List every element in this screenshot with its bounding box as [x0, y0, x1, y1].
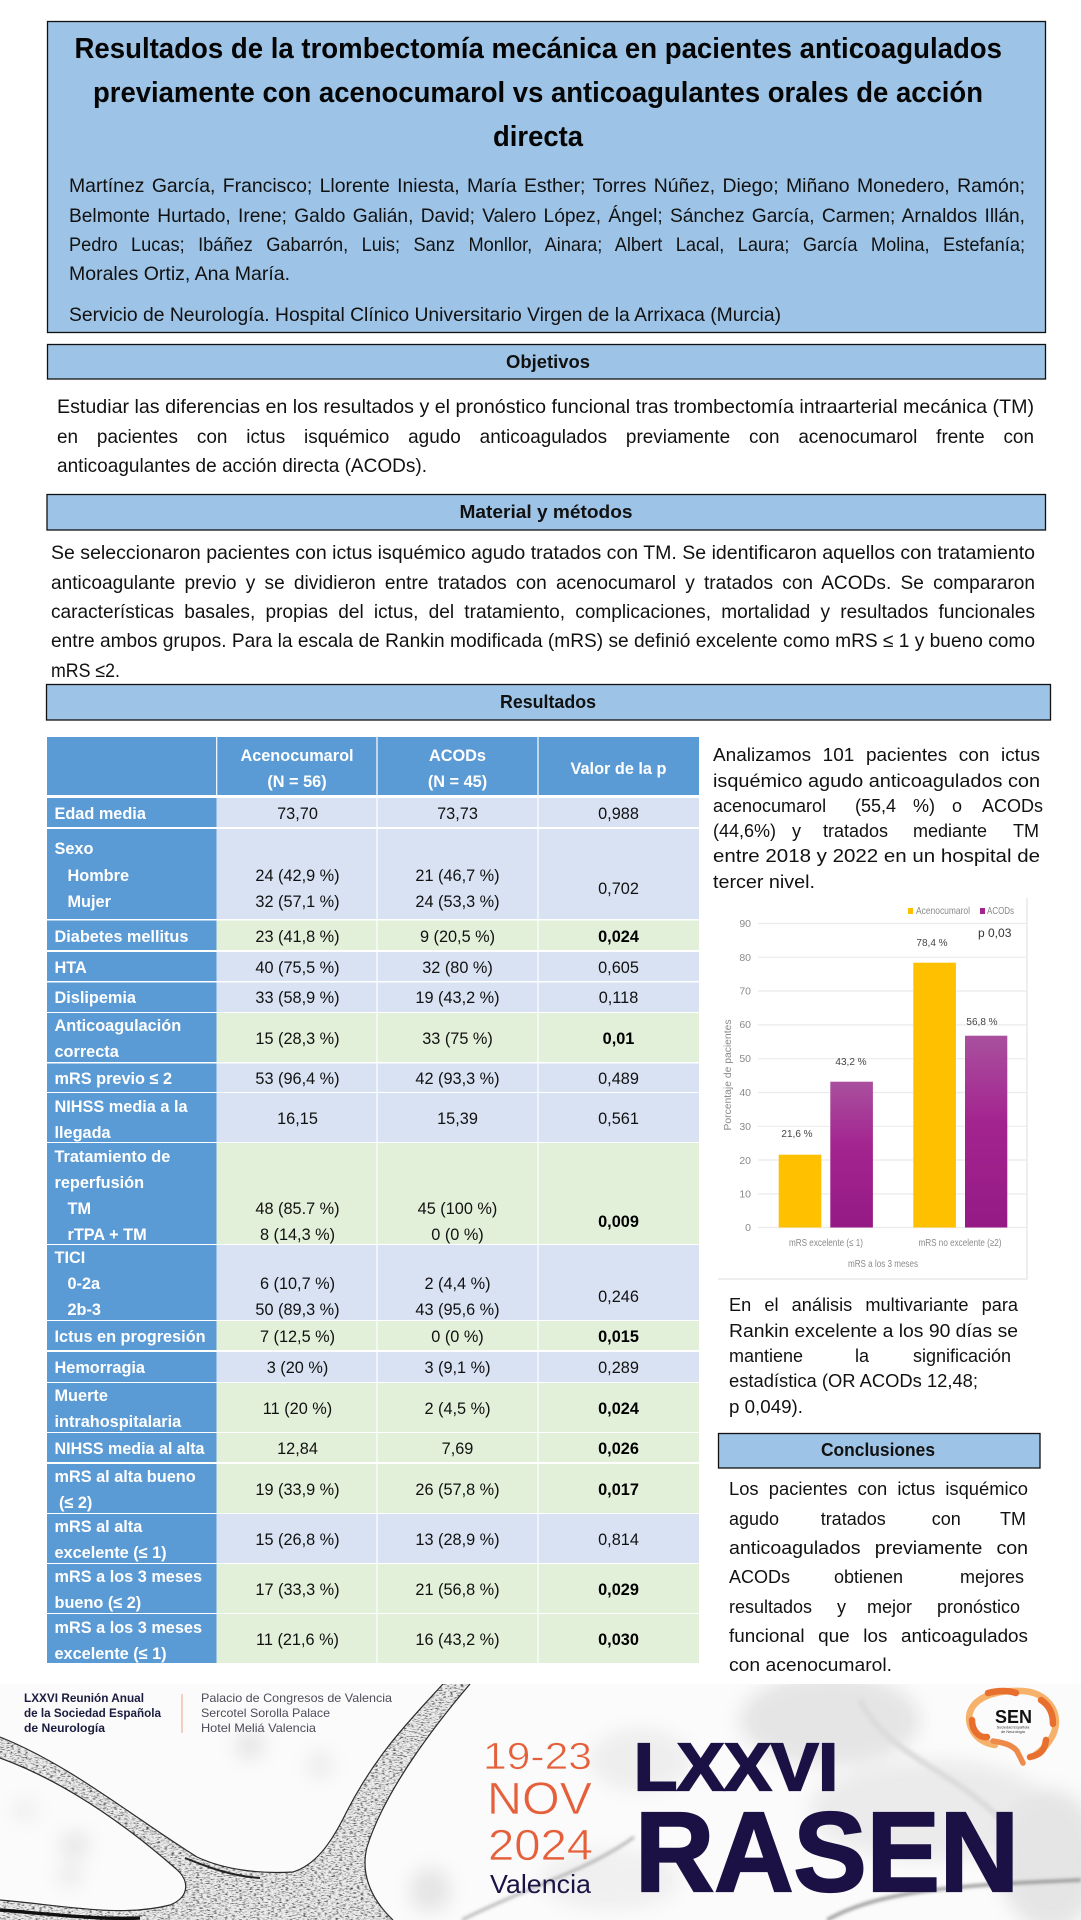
- text: material y métodos: mRS ≤2.: [51, 660, 120, 682]
- y axis labels: [739, 918, 751, 1234]
- row: Tratamiento de reperfusión: [47, 1143, 699, 1244]
- conference text top left: de la Sociedad Española: [24, 1706, 161, 1720]
- text: material y métodos: características basales, propias del ictus, del tratamiento, complicaciones, mortalidad y resultados funcionales: [51, 601, 1035, 623]
- row: mRS previo: 42 (93,3 %): [415, 1070, 500, 1088]
- banner background: [0, 1675, 1081, 1920]
- row: mRS al alta bueno: 26 (57,8 %): [415, 1481, 500, 1499]
- row: Tratamiento de reperfusión: 0 (0 %): [431, 1226, 484, 1244]
- row: TICI: 0-2a: [68, 1275, 101, 1293]
- row: mRS a los 3 meses excelente: 11 (21,6 %): [256, 1631, 339, 1649]
- text: analysis summary: tratados: [823, 821, 888, 841]
- heading: Conclusiones: Conclusiones: [821, 1439, 935, 1460]
- text: multivariate analysis: Rankin excelente a los 90 días se: [729, 1321, 1018, 1341]
- row: mRS previo: [47, 1064, 699, 1092]
- row: Tratamiento de reperfusión: rTPA + TM: [68, 1226, 147, 1244]
- text: multivariate analysis: la: [855, 1346, 870, 1366]
- row: NIHSS media al alta: [47, 1433, 699, 1462]
- row: mRS al alta excelente: excelente (≤ 1): [54, 1544, 167, 1562]
- dates: 2024: [488, 1821, 593, 1870]
- authors: Morales Ortiz, Ana María.: [69, 263, 290, 285]
- text: analysis summary: ACODs: [982, 796, 1043, 816]
- row: mRS al alta bueno: (≤ 2): [59, 1494, 92, 1512]
- value labels: [781, 938, 998, 1140]
- text: analysis summary: y: [792, 821, 801, 841]
- row: TICI: 50 (89,3 %): [255, 1301, 340, 1319]
- authors: Pedro Lucas; Ibáñez Gabarrón, Luis; Sanz Monllor, Ainara; Albert Lacal, Laura; García Molina, Estefanía;: [69, 234, 1025, 256]
- row: mRS previo: 53 (96,4 %): [255, 1070, 340, 1088]
- row: Muerte intrahospitalaria: intrahospitalaria: [54, 1413, 182, 1431]
- heading: Resultados: [46, 684, 1050, 720]
- row: HTA: 40 (75,5 %): [255, 959, 340, 977]
- row: Edad media: Edad media: [54, 805, 147, 823]
- text: conclusiones: mejores: [960, 1567, 1024, 1587]
- y axis labels: 20: [739, 1155, 751, 1167]
- text: analysis summary: entre 2018 y 2022 en un hospital de: [713, 846, 1040, 866]
- category labels: mRS a los 3 meses: [848, 1258, 918, 1270]
- text: conclusiones: con: [932, 1509, 961, 1529]
- row: Diabetes mellitus: [47, 920, 699, 950]
- row: Anticoagulación correcta: [47, 1013, 699, 1062]
- text: conclusiones: TM: [1000, 1509, 1026, 1529]
- dates: 19-23: [483, 1736, 592, 1778]
- row: HTA: [47, 952, 699, 981]
- row: Sexo: Sexo: [54, 840, 93, 858]
- row: TICI: 0,246: [598, 1288, 639, 1306]
- row: NIHSS media a la llegada: [47, 1093, 699, 1142]
- y axis labels: 40: [739, 1087, 751, 1099]
- row: Diabetes mellitus: Diabetes mellitus: [54, 928, 188, 946]
- row: Muerte intrahospitalaria: 11 (20 %): [263, 1400, 332, 1418]
- row: Dislipemia: 19 (43,2 %): [415, 989, 500, 1007]
- category labels: mRS excelente (≤ 1): [789, 1237, 863, 1249]
- venues: Hotel Meliá Valencia: [201, 1721, 316, 1735]
- row: mRS a los 3 meses excelente: [47, 1614, 699, 1663]
- category labels: [789, 1237, 1002, 1270]
- row: TICI: 43 (95,6 %): [415, 1301, 500, 1319]
- row: NIHSS media al alta: 7,69: [442, 1440, 473, 1458]
- title: Resultados de la trombectomía mecánica en pacientes anticoagulados: [74, 33, 1002, 65]
- table header: Acenocumarol: [240, 747, 354, 765]
- text: multivariate analysis: significación: [913, 1346, 1011, 1366]
- row: NIHSS media a la llegada: llegada: [54, 1124, 112, 1142]
- row: Sexo: 24 (53,3 %): [415, 893, 500, 911]
- row: NIHSS media al alta: NIHSS media al alta: [54, 1440, 205, 1458]
- text: conclusiones: mejor: [867, 1597, 912, 1617]
- text: conclusiones: Los pacientes con ictus isquémico: [729, 1479, 1028, 1499]
- city: Valencia: [490, 1869, 592, 1899]
- title: [74, 33, 1002, 153]
- title: directa: [493, 121, 584, 153]
- row: Hemorragia: Hemorragia: [54, 1359, 146, 1377]
- event name: [638, 1742, 1013, 1894]
- row: TICI: 2 (4,4 %): [424, 1275, 491, 1293]
- conference text top left: LXXVI Reunión Anual: [24, 1691, 144, 1705]
- legend: Acenocumarol: [916, 905, 970, 917]
- legend: ACODs: [987, 905, 1014, 917]
- affiliation: Servicio de Neurología. Hospital Clínico Universitario Virgen de la Arrixaca (Murcia): [69, 304, 781, 326]
- row: Edad media: 0,988: [598, 805, 639, 823]
- row: mRS al alta excelente: [47, 1514, 699, 1563]
- row: mRS a los 3 meses bueno: 21 (56,8 %): [415, 1581, 500, 1599]
- y axis labels: 90: [739, 918, 751, 930]
- text: material y métodos: entre ambos grupos. Para la escala de Rankin modificada (mRS) se definió excelente como mRS ≤ 1 y bueno como: [51, 630, 1035, 652]
- y axis labels: 10: [739, 1188, 751, 1200]
- text: objetivos: [57, 396, 1034, 477]
- table header: ACODs: [429, 747, 486, 765]
- table header: (N = 45): [428, 773, 487, 791]
- row: TICI: TICI: [54, 1249, 85, 1267]
- row: Sexo: 24 (42,9 %): [255, 867, 340, 885]
- row: Ictus en progresión: 0 (0 %): [431, 1328, 484, 1346]
- row: Edad media: [47, 798, 699, 827]
- value labels: 21,6 %: [781, 1129, 813, 1140]
- row: Ictus en progresión: [47, 1321, 699, 1350]
- text: conclusiones: [729, 1479, 1028, 1675]
- row: mRS al alta excelente: 0,814: [598, 1531, 639, 1549]
- dates: NOV: [487, 1773, 592, 1824]
- row: mRS al alta bueno: 0,017: [598, 1481, 639, 1499]
- row: TICI: [47, 1245, 699, 1320]
- row: Diabetes mellitus: 23 (41,8 %): [255, 928, 340, 946]
- text: analysis summary: isquémico agudo anticoagulados con: [713, 771, 1040, 791]
- value labels: 78,4 %: [916, 938, 948, 949]
- y axis labels: 80: [739, 952, 751, 964]
- text: conclusiones: con acenocumarol.: [729, 1655, 892, 1675]
- authors: Martínez García, Francisco; Llorente Iniesta, María Esther; Torres Núñez, Diego; Miñano Monedero, Ramón;: [69, 175, 1025, 197]
- venues: Sercotel Sorolla Palace: [201, 1706, 330, 1720]
- logo: SEN brain: Sociedad Española: [997, 1726, 1030, 1730]
- text: analysis summary: mediante: [913, 821, 987, 841]
- text: material y métodos: [51, 542, 1035, 682]
- row: Sexo: 21 (46,7 %): [415, 867, 500, 885]
- row: Edad media: 73,70: [277, 805, 318, 823]
- row: Sexo: 32 (57,1 %): [255, 893, 340, 911]
- heading: Material y métodos: [47, 494, 1046, 530]
- row: mRS previo: mRS previo ≤ 2: [54, 1070, 172, 1088]
- row: Hemorragia: 3 (20 %): [267, 1359, 328, 1377]
- row: mRS al alta excelente: 13 (28,9 %): [415, 1531, 500, 1549]
- text: conclusiones: y: [837, 1597, 846, 1617]
- row: Muerte intrahospitalaria: Muerte: [54, 1387, 108, 1405]
- text: conclusiones: pronóstico: [937, 1597, 1020, 1617]
- text: conclusiones: anticoagulados previamente con: [729, 1538, 1028, 1558]
- row: mRS al alta excelente: 15 (26,8 %): [255, 1531, 340, 1549]
- row: Tratamiento de reperfusión: Tratamiento de: [54, 1148, 170, 1166]
- table header: Valor de la p: [571, 760, 667, 778]
- logo: SEN brain: de Neurología: [1001, 1730, 1026, 1734]
- venues: Palacio de Congresos de Valencia: [201, 1691, 392, 1705]
- heading: Objetivos: Objetivos: [506, 351, 590, 372]
- row: mRS a los 3 meses bueno: mRS a los 3 meses: [54, 1568, 202, 1586]
- row: Anticoagulación correcta: Anticoagulación: [54, 1017, 181, 1035]
- text: analysis summary: (44,6%): [713, 821, 776, 841]
- row: NIHSS media a la llegada: NIHSS media a la: [54, 1098, 188, 1116]
- heading: Objetivos: [48, 344, 1046, 379]
- row: Diabetes mellitus: 0,024: [598, 928, 639, 946]
- row: mRS al alta bueno: mRS al alta bueno: [54, 1468, 196, 1486]
- row: Tratamiento de reperfusión: 8 (14,3 %): [260, 1226, 335, 1244]
- y axis labels: 50: [739, 1053, 751, 1065]
- y axis labels: 60: [739, 1019, 751, 1031]
- row: Ictus en progresión: 0,015: [598, 1328, 639, 1346]
- row: Muerte intrahospitalaria: [47, 1383, 699, 1432]
- value labels: 56,8 %: [966, 1017, 998, 1028]
- text: multivariate analysis: p 0,049).: [729, 1397, 803, 1417]
- value labels: 43,2 %: [835, 1057, 867, 1068]
- row: Tratamiento de reperfusión: 45 (100 %): [418, 1200, 497, 1218]
- text: analysis summary: acenocumarol: [713, 796, 826, 816]
- row: Dislipemia: [47, 982, 699, 1012]
- heading: Resultados: Resultados: [500, 691, 596, 712]
- text: conclusiones: funcional que los anticoagulados: [729, 1626, 1028, 1646]
- row: mRS al alta excelente: mRS al alta: [54, 1518, 143, 1536]
- row: mRS al alta bueno: 19 (33,9 %): [255, 1481, 340, 1499]
- row: mRS a los 3 meses bueno: [47, 1564, 699, 1613]
- row: Muerte intrahospitalaria: 2 (4,5 %): [424, 1400, 491, 1418]
- row: mRS a los 3 meses bueno: 0,029: [598, 1581, 639, 1599]
- banner: congress footer: [0, 1675, 1081, 1920]
- text: objetivos: anticoagulantes de acción directa (ACODs).: [57, 455, 427, 477]
- text: conclusiones: resultados: [729, 1597, 812, 1617]
- row: Edad media: 73,73: [437, 805, 478, 823]
- y axis title: Porcentaje de pacientes: [722, 1020, 734, 1130]
- row: Tratamiento de reperfusión: 0,009: [598, 1213, 639, 1231]
- row: Tratamiento de reperfusión: reperfusión: [54, 1174, 144, 1192]
- text: conclusiones: agudo: [729, 1509, 779, 1529]
- text: analysis summary: %): [913, 796, 935, 816]
- row: Ictus en progresión: 7 (12,5 %): [260, 1328, 335, 1346]
- row: Diabetes mellitus: 9 (20,5 %): [420, 928, 495, 946]
- heading: Material y métodos: Material y métodos: [460, 501, 632, 522]
- text: multivariate analysis: estadística (OR ACODs 12,48;: [729, 1371, 978, 1391]
- row: mRS a los 3 meses excelente: excelente (≤ 1): [54, 1645, 167, 1663]
- venues: [202, 1694, 392, 1732]
- row: TICI: 6 (10,7 %): [260, 1275, 335, 1293]
- row: Sexo: [47, 829, 699, 919]
- row: HTA: HTA: [54, 959, 87, 977]
- y axis labels: 30: [739, 1121, 751, 1133]
- logo: SEN brain: SEN: [995, 1707, 1032, 1727]
- row: Hemorragia: 0,289: [598, 1359, 639, 1377]
- row: mRS a los 3 meses excelente: 16 (43,2 %): [415, 1631, 500, 1649]
- row: NIHSS media al alta: 0,026: [598, 1440, 639, 1458]
- y axis labels: 70: [739, 986, 751, 998]
- panel: title and authors: [48, 22, 1046, 332]
- row: mRS a los 3 meses excelente: 0,030: [598, 1631, 639, 1649]
- text: analysis summary: tercer nivel.: [713, 872, 815, 892]
- logo: SEN brain: [969, 1691, 1056, 1763]
- bar chart: mRS a los 3 meses: [718, 898, 1027, 1279]
- dates: [486, 1742, 592, 1860]
- conference text top left: [24, 1691, 161, 1735]
- text: objetivos: en pacientes con ictus isquémico agudo anticoagulados previamente con acenocumarol frente con: [57, 426, 1034, 448]
- row: Hemorragia: [47, 1352, 699, 1382]
- text: material y métodos: anticoagulante previo y se dividieron entre tratados con acenocumarol y tratados con ACODs. Se compararon: [51, 572, 1035, 594]
- legend: [908, 905, 1014, 917]
- row: Sexo: Hombre: [68, 867, 129, 885]
- text: conclusiones: obtienen: [834, 1567, 903, 1587]
- row: NIHSS media al alta: 12,84: [277, 1440, 318, 1458]
- row: Dislipemia: Dislipemia: [54, 989, 137, 1007]
- row: Sexo: Mujer: [68, 893, 112, 911]
- text: analysis summary: (55,4: [855, 796, 896, 816]
- row: Sexo: 0,702: [598, 880, 639, 898]
- neuron illustration: [0, 1684, 480, 1920]
- text: analysis summary: o: [952, 796, 962, 816]
- row: Tratamiento de reperfusión: TM: [68, 1200, 91, 1218]
- text: objetivos: Estudiar las diferencias en los resultados y el pronóstico funcional tras trombectomía intraarterial mecánica (TM): [57, 396, 1034, 418]
- authors: Belmonte Hurtado, Irene; Galdo Galián, David; Valero López, Ángel; Sánchez García, Carmen; Arnaldos Illán,: [69, 204, 1025, 227]
- heading: Conclusiones: [718, 1434, 1040, 1468]
- row: Anticoagulación correcta: correcta: [54, 1043, 120, 1061]
- row: Dislipemia: 0,118: [599, 989, 638, 1007]
- table header: (N = 56): [267, 773, 327, 791]
- row: mRS al alta bueno: [47, 1464, 699, 1513]
- row: HTA: 32 (80 %): [422, 959, 493, 977]
- text: material y métodos: Se seleccionaron pacientes con ictus isquémico agudo tratados con TM. Se identificaron aquellos con tratamiento: [51, 542, 1035, 564]
- row: mRS a los 3 meses bueno: bueno (≤ 2): [54, 1594, 141, 1612]
- row: mRS previo: 0,489: [598, 1070, 639, 1088]
- title: previamente con acenocumarol vs anticoagulantes orales de acción: [93, 77, 983, 109]
- row: Anticoagulación correcta: 33 (75 %): [422, 1030, 493, 1048]
- row: mRS a los 3 meses excelente: mRS a los 3 meses: [54, 1619, 202, 1637]
- table header: [47, 737, 699, 795]
- text: conclusiones: ACODs: [729, 1567, 790, 1587]
- bars: [779, 963, 1007, 1228]
- text: conclusiones: tratados: [821, 1509, 886, 1529]
- row: Anticoagulación correcta: 15 (28,3 %): [255, 1030, 340, 1048]
- event name: LXXVI: [634, 1730, 838, 1805]
- p value: p 0,03: [978, 926, 1012, 940]
- authors: [69, 175, 1025, 285]
- row: HTA: 0,605: [598, 959, 639, 977]
- row: NIHSS media a la llegada: 16,15: [277, 1110, 318, 1128]
- y axis labels: 0: [745, 1222, 751, 1234]
- row: Muerte intrahospitalaria: 0,024: [598, 1400, 639, 1418]
- table: comparison acenocumarol vs ACODs: [47, 737, 699, 1663]
- row: Dislipemia: 33 (58,9 %): [255, 989, 340, 1007]
- text: multivariate analysis: [729, 1295, 1019, 1417]
- row: Ictus en progresión: Ictus en progresión: [54, 1328, 206, 1346]
- row: NIHSS media a la llegada: 0,561: [598, 1110, 639, 1128]
- category labels: mRS no excelente (≥2): [918, 1237, 1002, 1249]
- text: analysis summary: [713, 745, 1043, 892]
- row: Anticoagulación correcta: 0,01: [603, 1030, 634, 1048]
- text: analysis summary: Analizamos 101 pacientes con ictus: [713, 745, 1040, 765]
- event name: RASEN: [635, 1789, 1019, 1915]
- row: TICI: 2b-3: [68, 1301, 101, 1319]
- row: mRS a los 3 meses bueno: 17 (33,3 %): [255, 1581, 340, 1599]
- text: multivariate analysis: En el análisis multivariante para: [729, 1295, 1019, 1315]
- conference text top left: de Neurología: [24, 1721, 105, 1735]
- row: Tratamiento de reperfusión: 48 (85.7 %): [255, 1200, 340, 1218]
- text: analysis summary: TM: [1013, 821, 1039, 841]
- row: Hemorragia: 3 (9,1 %): [424, 1359, 491, 1377]
- row: NIHSS media a la llegada: 15,39: [437, 1110, 478, 1128]
- text: multivariate analysis: mantiene: [729, 1346, 803, 1366]
